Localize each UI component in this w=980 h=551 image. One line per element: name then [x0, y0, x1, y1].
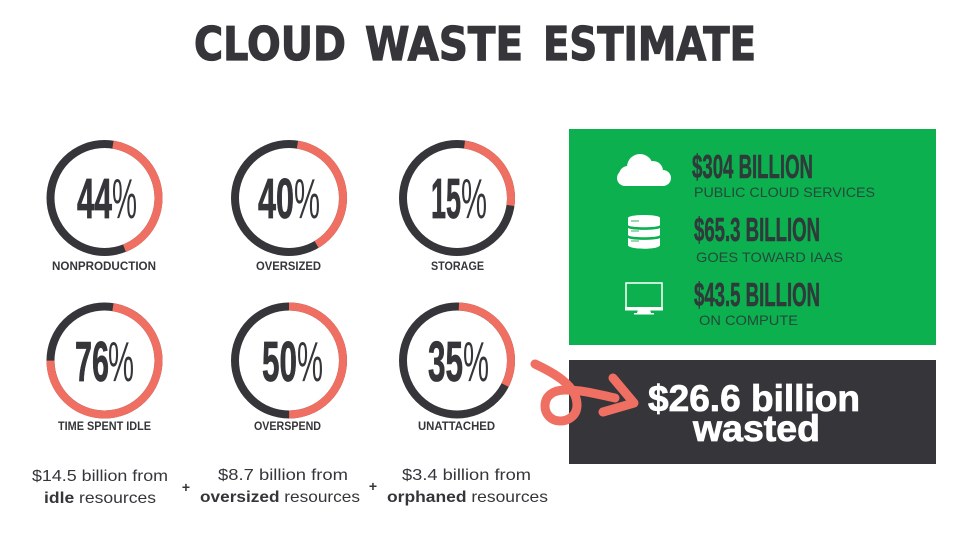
plus sign: + [369, 478, 377, 494]
text: goes toward iaas: GOES TOWARD IAAS [696, 249, 843, 265]
text: public cloud services: PUBLIC CLOUD SERVICES [694, 184, 875, 200]
gauge: 35% unattached: % [463, 330, 489, 394]
footnote: idle resources: $14.5 billion from [32, 468, 168, 485]
gauge: 15% storage: STORAGE [431, 259, 484, 273]
footnote: oversized resources: oversized resources [200, 489, 360, 506]
title: CLOUD [194, 17, 346, 71]
gauge: 50% overspend: OVERSPEND [254, 419, 321, 433]
footnote: oversized resources: $8.7 billion from [218, 467, 348, 484]
gauge: 76% time spent idle [43, 299, 166, 433]
gauge: 40% oversized: OVERSIZED [256, 259, 321, 273]
title: WASTE [365, 17, 523, 71]
footnote: orphaned resources: orphaned resources [387, 489, 548, 506]
text: $43.5 billion: $43.5 BILLION [694, 276, 820, 313]
arrow [535, 364, 634, 421]
gauge: 50% overspend: % [297, 330, 323, 394]
gauge: 35% unattached [401, 305, 513, 433]
gauge: 35% unattached: UNATTACHED [418, 419, 495, 433]
footnote: orphaned resources [387, 467, 548, 506]
gauge: 76% time spent idle: 76 [75, 330, 109, 394]
footnote: idle resources: idle resources [44, 490, 156, 507]
gauge: 40% oversized [227, 136, 351, 273]
panel: total wasted [569, 360, 936, 464]
text: $65.3 billion: $65.3 BILLION [694, 211, 820, 248]
text: on compute: ON COMPUTE [699, 312, 798, 328]
gauge: 44% nonproduction: NONPRODUCTION [52, 259, 156, 273]
gauge: 50% overspend: 50 [262, 330, 297, 394]
gauge: 44% nonproduction [43, 136, 166, 273]
title [194, 17, 756, 71]
footnote: orphaned resources: $3.4 billion from [402, 467, 531, 484]
gauge: 44% nonproduction: % [112, 167, 137, 231]
icon: monitor [625, 283, 663, 314]
footnote: oversized resources [200, 467, 360, 506]
gauge: 76% time spent idle: % [108, 330, 134, 394]
gauge: 40% oversized: 40 [258, 167, 294, 231]
panel: total wasted: wasted [692, 408, 820, 449]
icon: cloud [617, 154, 671, 186]
gauge: 15% storage: 15 [431, 167, 461, 231]
gauge: 15% storage: % [461, 167, 487, 231]
panel: total wasted: $26.6 billion [648, 378, 860, 419]
gauge: 15% storage [396, 137, 518, 273]
icon: database [628, 215, 660, 249]
title: ESTIMATE [543, 17, 756, 71]
gauge: 35% unattached: 35 [428, 330, 463, 394]
plus sign: + [182, 479, 190, 495]
gauge: 40% oversized: % [294, 167, 320, 231]
footnote: idle resources [32, 468, 168, 507]
text: $304 billion: $304 BILLION [692, 148, 813, 185]
gauge: 50% overspend [235, 306, 343, 433]
gauge: 44% nonproduction: 44 [77, 167, 112, 231]
gauge: 76% time spent idle: TIME SPENT IDLE [58, 419, 151, 433]
panel: cloud spend [569, 129, 936, 345]
